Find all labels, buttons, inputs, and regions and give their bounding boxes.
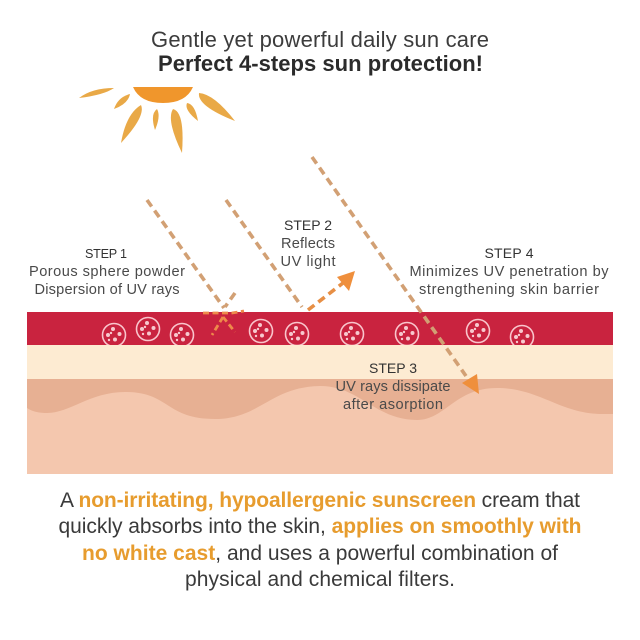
text: step 4: strengthening skin barrier: [419, 282, 599, 298]
description text: A non-irritating, hypoallergenic sunscreen cream that: [60, 489, 580, 512]
layer: dermis wave: [27, 379, 613, 420]
description text: [58, 489, 582, 591]
title: [151, 27, 489, 76]
text: step 4: [410, 245, 609, 298]
text: step 3: after asorption: [343, 397, 443, 413]
description text: physical and chemical filters.: [185, 568, 455, 591]
layer: deep skin: [27, 379, 613, 474]
text: step 2: UV light: [280, 254, 336, 270]
text: step 2: STEP 2: [284, 217, 332, 233]
arrow: ray scattered at step 1: [147, 200, 244, 335]
text: step 3: UV rays dissipate: [336, 379, 450, 395]
layer: cream band: [27, 345, 613, 379]
text: step 1: [29, 247, 185, 298]
text: step 2: [280, 217, 336, 270]
text: step 1: Porous sphere powder: [29, 264, 185, 280]
powder spheres: [102, 318, 534, 348]
text: step 1: STEP 1: [85, 247, 127, 261]
title: Gentle yet powerful daily sun care: [151, 27, 489, 52]
text: step 3: STEP 3: [369, 360, 417, 376]
description text: quickly absorbs into the skin, applies on smoothly with: [58, 515, 582, 538]
text: step 3: [336, 360, 450, 413]
text: step 2: Reflects: [281, 236, 335, 252]
title: Perfect 4-steps sun protection!: [158, 51, 483, 76]
text: step 4: Minimizes UV penetration by: [410, 264, 609, 280]
arrow: ray penetrating to step 3: [312, 157, 479, 394]
icon: sun: [79, 87, 235, 153]
skin layers diagram: [27, 312, 613, 474]
layer: red top band: [27, 312, 613, 345]
text: step 4: STEP 4: [484, 245, 534, 261]
description text: no white cast, and uses a powerful combination of: [82, 542, 558, 565]
text: step 1: Dispersion of UV rays: [34, 282, 180, 298]
arrow: ray reflected at step 2: [226, 200, 355, 310]
